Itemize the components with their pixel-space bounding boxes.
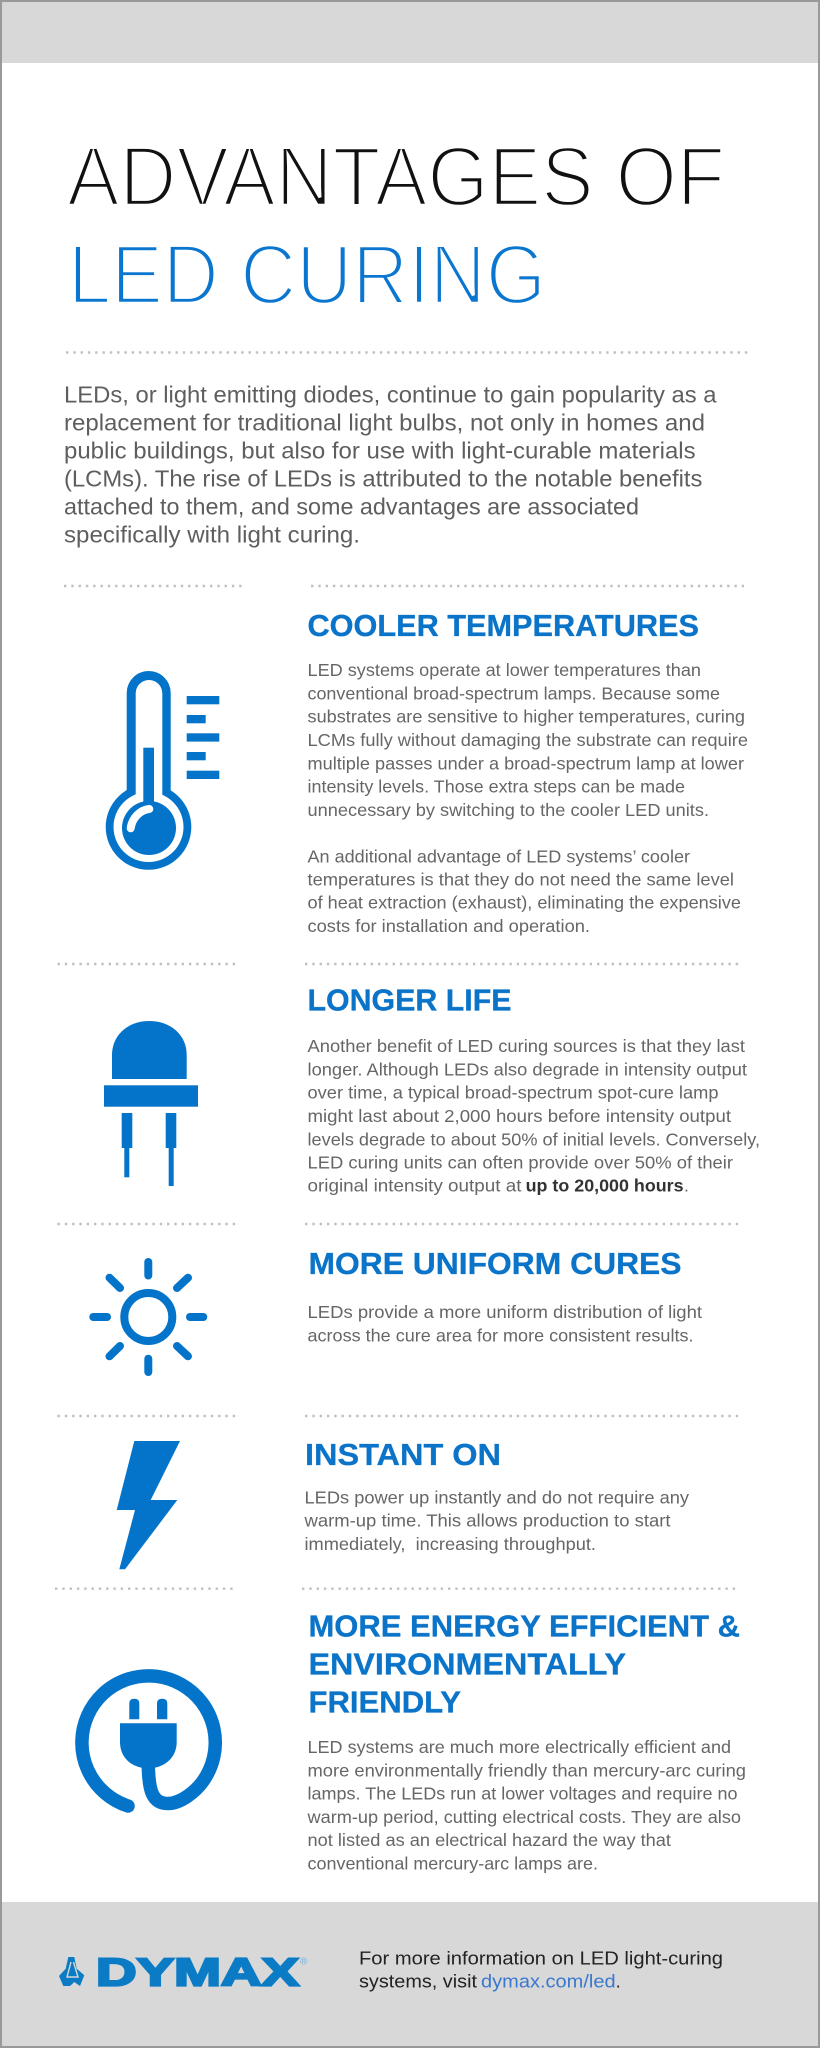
icon: LED diode <box>104 1021 198 1186</box>
footer call to action: dymax.com/led <box>481 1970 616 1991</box>
intro paragraph: specifically with light curing. <box>64 521 360 547</box>
text: energy efficient body: lamps. The LEDs run at lower voltages and require no <box>308 1784 738 1804</box>
text: longer life body: . <box>684 1176 689 1196</box>
heading: more energy efficient and environmentally friendly: ENVIRONMENTALLY <box>308 1648 626 1682</box>
section: longer life <box>308 984 760 1196</box>
icon: lightning bolt <box>117 1441 180 1569</box>
text: cooler temperatures body: of heat extraction (exhaust), eliminating the expensive <box>308 893 741 913</box>
text: cooler temperatures body: intensity levels. Those extra steps can be made <box>308 777 685 797</box>
text: more uniform cures body <box>308 1302 702 1345</box>
text: longer life body: longer. Although LEDs also degrade in intensity output <box>308 1059 747 1079</box>
footer band <box>0 1902 820 2048</box>
text: instant on body: warm-up time. This allows production to start <box>303 1511 671 1531</box>
logo: Dymax: DYMAX <box>96 1952 299 1994</box>
section: more uniform cures <box>308 1247 702 1345</box>
section: instant on <box>303 1438 689 1554</box>
icon: thermometer <box>106 671 219 870</box>
text: energy efficient body: more environmentally friendly than mercury-arc curing <box>308 1760 746 1780</box>
title: LED CURING <box>68 228 546 322</box>
footer call to action <box>359 1947 723 1991</box>
text: cooler temperatures body: costs for installation and operation. <box>308 916 590 936</box>
section: cooler temperatures <box>308 609 748 936</box>
text: cooler temperatures body <box>308 660 748 936</box>
logo: Dymax: ® <box>300 1956 308 1968</box>
section: more energy efficient <box>306 1610 746 1873</box>
text: longer life body: over time, a typical broad-spectrum spot-cure lamp <box>308 1083 718 1103</box>
top header band <box>0 0 820 63</box>
text: instant on body: LEDs power up instantly and do not require any <box>304 1487 689 1507</box>
text: cooler temperatures body: multiple passes under a broad-spectrum lamp at lower <box>308 753 744 773</box>
heading: more energy efficient and environmentally friendly <box>308 1610 740 1719</box>
footer call to action: systems, visit <box>359 1970 477 1991</box>
text: energy efficient body <box>306 1737 746 1873</box>
intro paragraph: public buildings, but also for use with light-curable materials <box>64 438 696 464</box>
text: energy efficient body: conventional mercury-arc lamps are. <box>308 1853 598 1873</box>
text: instant on body: immediately, increasing throughput. <box>304 1534 596 1554</box>
text: longer life body: up to 20,000 hours <box>526 1176 684 1196</box>
text: cooler temperatures body: An additional advantage of LED systems’ cooler <box>308 846 690 866</box>
text: longer life body <box>308 1036 760 1196</box>
text: longer life body: might last about 2,000 hours before intensity output <box>308 1106 731 1126</box>
intro paragraph: attached to them, and some advantages are associated <box>64 493 639 519</box>
heading: longer life: LONGER LIFE <box>308 984 512 1018</box>
heading: more energy efficient and environmentally friendly: FRIENDLY <box>308 1685 461 1719</box>
intro paragraph: (LCMs). The rise of LEDs is attributed to the notable benefits <box>64 465 702 491</box>
text: longer life body: levels degrade to about 50% of initial levels. Conversely, <box>308 1130 760 1150</box>
text: cooler temperatures body: LED systems operate at lower temperatures than <box>308 660 701 680</box>
text: energy efficient body: LED systems are much more electrically efficient and <box>308 1737 731 1757</box>
intro paragraph <box>64 382 717 547</box>
footer call to action: . <box>616 1970 621 1991</box>
text: energy efficient body: not listed as an electrical hazard the way that <box>308 1830 671 1850</box>
text: instant on body <box>303 1487 689 1554</box>
heading: more energy efficient and environmentally friendly: MORE ENERGY EFFICIENT & <box>308 1610 740 1644</box>
icon: electrical plug <box>82 1676 215 1806</box>
heading: instant on: INSTANT ON <box>305 1438 501 1472</box>
title: ADVANTAGES OF <box>67 130 725 224</box>
title <box>67 130 725 322</box>
text: energy efficient body: warm-up period, cutting electrical costs. They are also <box>306 1807 741 1827</box>
icon: sun <box>93 1262 203 1372</box>
text: cooler temperatures body: temperatures is that they do not need the same level <box>308 870 734 890</box>
text: longer life body: Another benefit of LED curing sources is that they last <box>308 1036 745 1056</box>
text: cooler temperatures body: conventional broad-spectrum lamps. Because some <box>308 683 720 703</box>
text: cooler temperatures body: unnecessary by switching to the cooler LED units. <box>308 800 709 820</box>
intro paragraph: LEDs, or light emitting diodes, continue to gain popularity as a <box>64 382 717 408</box>
logo: Dymax <box>59 1952 308 1994</box>
text: longer life body: original intensity output at <box>308 1176 522 1196</box>
heading: more uniform cures: MORE UNIFORM CURES <box>308 1247 682 1281</box>
text: longer life body: LED curing units can often provide over 50% of their <box>308 1153 733 1173</box>
text: cooler temperatures body: LCMs fully without damaging the substrate can require <box>308 730 748 750</box>
text: cooler temperatures body: substrates are sensitive to higher temperatures, curing <box>308 707 745 727</box>
heading: cooler temperatures: COOLER TEMPERATURES <box>308 609 699 643</box>
text: more uniform cures body: LEDs provide a more uniform distribution of light <box>308 1302 702 1322</box>
footer call to action: For more information on LED light-curing <box>359 1947 723 1968</box>
intro paragraph: replacement for traditional light bulbs, not only in homes and <box>64 410 705 436</box>
text: more uniform cures body: across the cure area for more consistent results. <box>308 1325 694 1345</box>
